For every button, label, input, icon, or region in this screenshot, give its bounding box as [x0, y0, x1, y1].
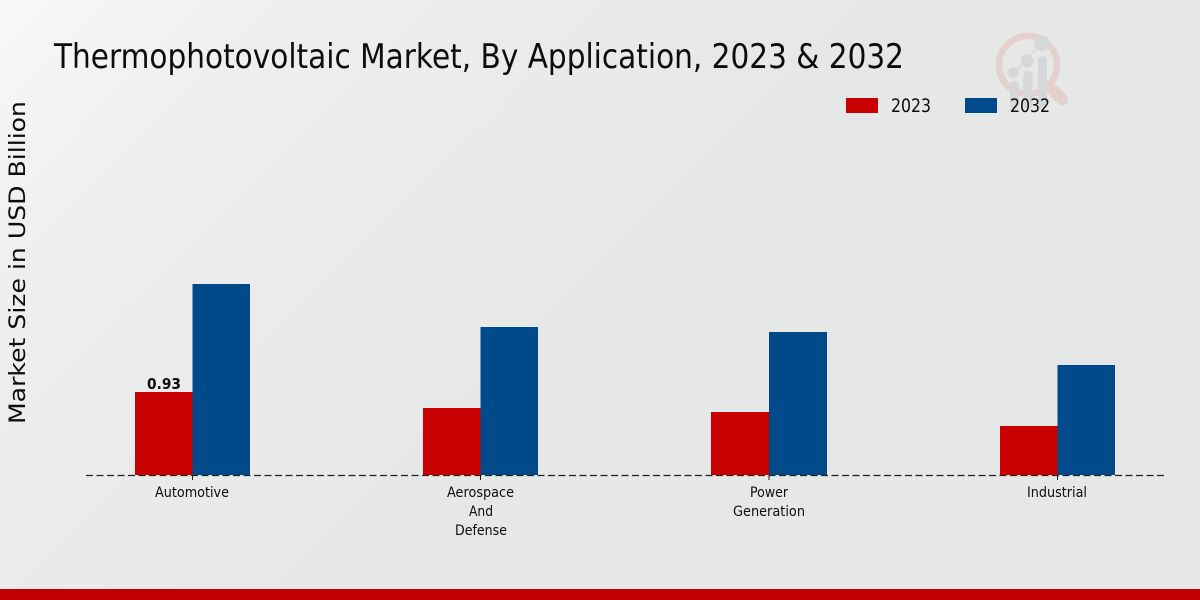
- baseline: [86, 474, 1164, 476]
- group: Power Generation: Power: [750, 485, 788, 501]
- group: Automotive: Automotive: [155, 485, 229, 501]
- group: Aerospace And Defense: And: [469, 504, 493, 520]
- group: Aerospace And Defense: Defense: [455, 523, 507, 539]
- group: Industrial: Industrial: [1027, 485, 1087, 501]
- title: Thermophotovoltaic Market, By Application, 2023 & 2032: [53, 37, 904, 77]
- legend: [846, 96, 1050, 117]
- y axis label: Market Size in USD Billion: [5, 101, 31, 424]
- legend item: 2032: [965, 96, 1050, 117]
- legend item: 2023: [846, 96, 931, 117]
- group: Industrial: [1000, 365, 1115, 501]
- group: Aerospace And Defense: [423, 327, 538, 539]
- footer bar: [0, 589, 1200, 600]
- group: Power Generation: [711, 332, 827, 520]
- group: Automotive: [135, 284, 250, 501]
- group: Power Generation: Generation: [733, 504, 805, 520]
- bar chart: [86, 284, 1164, 539]
- group: Automotive: 0.93: [147, 375, 181, 393]
- legend item: 2032: 2032: [1010, 96, 1050, 117]
- group: Aerospace And Defense: Aerospace: [447, 485, 514, 501]
- legend item: 2023: 2023: [891, 96, 931, 117]
- icon: watermark logo: [999, 35, 1062, 109]
